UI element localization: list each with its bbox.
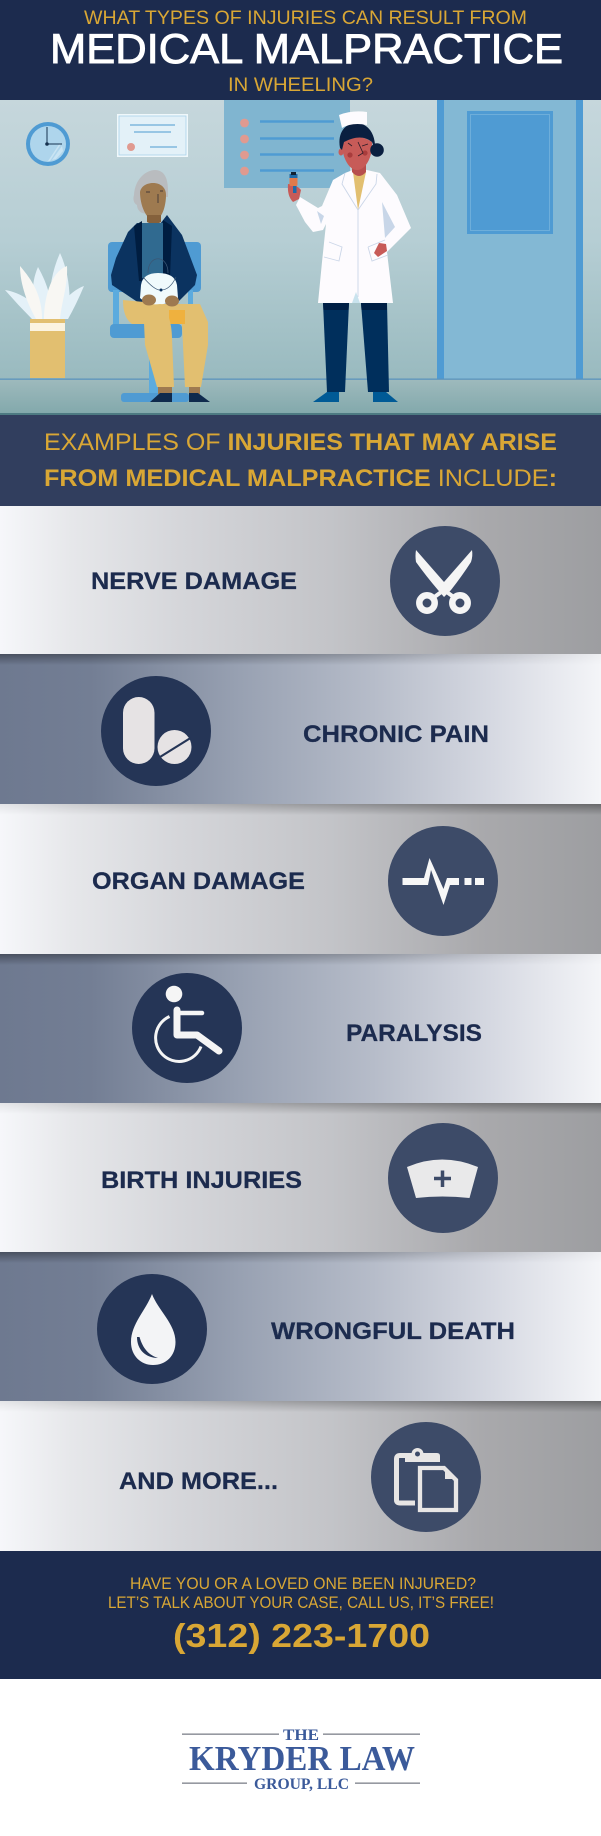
icon: wheelchair: [132, 973, 242, 1083]
icon: drop: [97, 1274, 207, 1384]
chair: [108, 242, 201, 292]
trousers: [123, 300, 208, 387]
icon: pills: [101, 676, 211, 786]
face features: [146, 191, 163, 203]
header banner: [0, 0, 601, 100]
potted plant: [5, 253, 84, 378]
hair: [133, 170, 168, 213]
handbag: [140, 273, 178, 304]
panel: chronic pain: CHRONIC PAIN: [303, 721, 489, 748]
certificate: [117, 114, 188, 157]
panel: organ damage: ORGAN DAMAGE: [92, 868, 305, 895]
lapels and pockets: [324, 173, 388, 297]
illustration: doctor and patient in clinic: [0, 100, 601, 415]
coat: [296, 168, 411, 303]
phone number: (312) 223-1700: [173, 1617, 430, 1654]
collar bands: [134, 221, 142, 281]
logo: The Kryder Law Group: THE: [283, 1727, 319, 1744]
icon: nurse cap: [388, 1123, 498, 1233]
title main: MEDICAL MALPRACTICE: [50, 25, 563, 72]
door: [437, 100, 583, 379]
hands: [142, 294, 156, 306]
logo: The Kryder Law Group: GROUP, LLC: [254, 1776, 349, 1793]
jacket: [111, 215, 197, 305]
neck and face: [352, 160, 366, 176]
shirt: [142, 223, 164, 278]
hair: [339, 123, 375, 150]
panel: paralysis: [0, 954, 601, 1103]
logo: The Kryder Law Group: [182, 1727, 420, 1793]
panel: nerve damage: [0, 506, 601, 654]
icon: pulse line: [388, 826, 498, 936]
wall chart: [224, 100, 350, 188]
icon: wall clock: [26, 122, 70, 166]
footer call to action: LET’S TALK ABOUT YOUR CASE, CALL US, IT’S FREE!: [108, 1593, 494, 1612]
panel: birth injuries: BIRTH INJURIES: [101, 1167, 302, 1194]
icon: clipboard and document: [371, 1422, 481, 1532]
panel: wrongful death: WRONGFUL DEATH: [271, 1318, 515, 1345]
panel: chronic pain: [0, 654, 601, 804]
panel: organ damage: [0, 804, 601, 954]
panel: paralysis: PARALYSIS: [346, 1020, 482, 1047]
doctor: [288, 111, 411, 402]
title line 1: WHAT TYPES OF INJURIES CAN RESULT FROM: [84, 7, 527, 29]
call to action text: HAVE YOU OR A LOVED ONE BEEN INJURED?: [130, 1574, 476, 1593]
heading line 2: FROM MEDICAL MALPRACTICE INCLUDE:: [44, 465, 557, 492]
title line 3: IN WHEELING?: [228, 74, 373, 96]
face features: [348, 142, 368, 156]
panel: and more: [0, 1401, 601, 1551]
logo: The Kryder Law Group: KRYDER LAW: [189, 1739, 415, 1778]
nurse hat: [339, 111, 367, 128]
face: [140, 183, 166, 220]
footer call to action: [0, 1551, 601, 1679]
examples heading band: [0, 415, 601, 506]
panel: and more: AND MORE...: [119, 1468, 278, 1495]
panel: wrongful death: [0, 1252, 601, 1401]
seated patient on chair: [108, 170, 210, 402]
trousers: [323, 303, 349, 392]
floor line: [0, 378, 601, 380]
icon: scissors: [390, 526, 500, 636]
shoes: [313, 392, 339, 402]
panel: nerve damage: NERVE DAMAGE: [91, 568, 297, 595]
hands and vial: [288, 184, 301, 202]
shirt: [353, 172, 366, 210]
heading line 1: EXAMPLES OF INJURIES THAT MAY ARISE: [44, 429, 557, 456]
coat shading: [382, 202, 395, 238]
shoes: [158, 387, 172, 394]
panel: birth injuries: [0, 1103, 601, 1252]
